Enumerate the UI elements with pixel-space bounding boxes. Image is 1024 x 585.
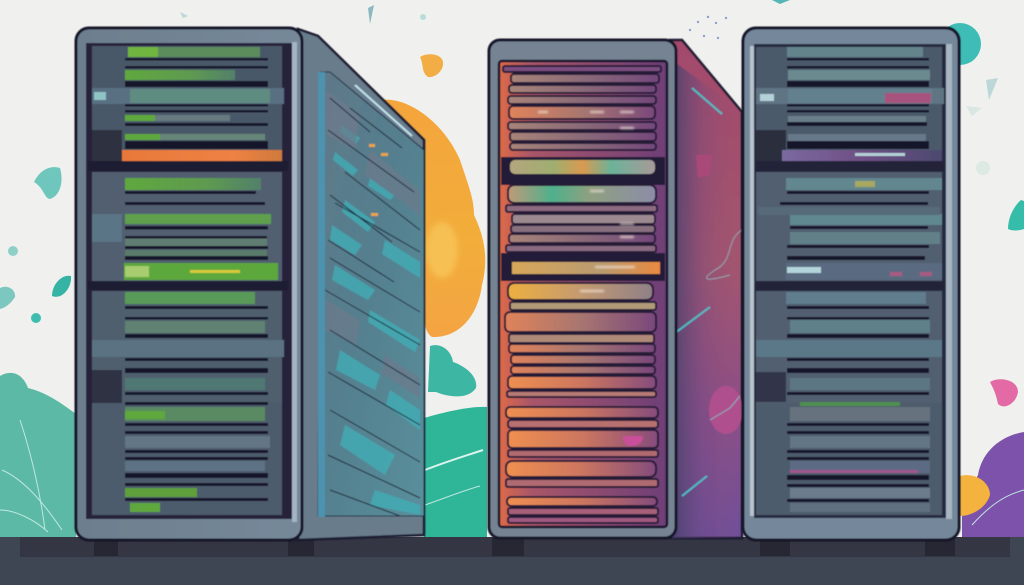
side panel — [298, 29, 424, 540]
rack unit group 4 — [756, 402, 942, 515]
rack unit group 3 — [92, 291, 284, 403]
drive stack: second — [506, 185, 657, 252]
rack unit group 2 — [88, 172, 288, 290]
blob: teal top right — [939, 23, 981, 65]
rack unit group 3 — [756, 291, 942, 403]
shape: teal ground middle — [424, 407, 487, 537]
blob: teal middle — [428, 345, 476, 396]
highlights — [538, 111, 635, 292]
rack interior — [499, 61, 667, 527]
tan bar — [512, 262, 660, 274]
floor — [0, 537, 1024, 585]
blob: orange right — [960, 475, 990, 516]
drive stack: upper — [503, 66, 661, 150]
rack unit group 1 — [88, 46, 288, 171]
blob: orange behind left rack — [380, 100, 485, 337]
blob: pink right — [990, 379, 1018, 406]
rack unit group 4 — [92, 402, 282, 515]
server rack: left — [76, 28, 424, 540]
rack unit group 2 — [756, 172, 944, 290]
frame — [743, 28, 959, 540]
dark gap — [501, 253, 665, 281]
confetti: floating drops — [0, 0, 1024, 323]
side panel — [670, 40, 743, 538]
rack unit group 1 — [756, 47, 944, 171]
drive stack: lower — [505, 283, 658, 523]
frame — [76, 28, 302, 540]
server rack: right — [743, 28, 959, 540]
server rack: middle — [489, 40, 743, 538]
blob: light orange patch — [426, 222, 458, 278]
colored bar — [510, 160, 655, 174]
rack interior — [754, 44, 946, 518]
shape: teal ground left — [0, 373, 76, 537]
shape: purple ground right — [962, 432, 1024, 537]
blob: small orange — [420, 54, 443, 77]
rack interior — [86, 43, 292, 519]
pink tag — [623, 436, 643, 446]
frame — [489, 40, 676, 538]
strokes: pale lines on teal ground — [0, 420, 1024, 532]
dark gap — [501, 157, 665, 185]
